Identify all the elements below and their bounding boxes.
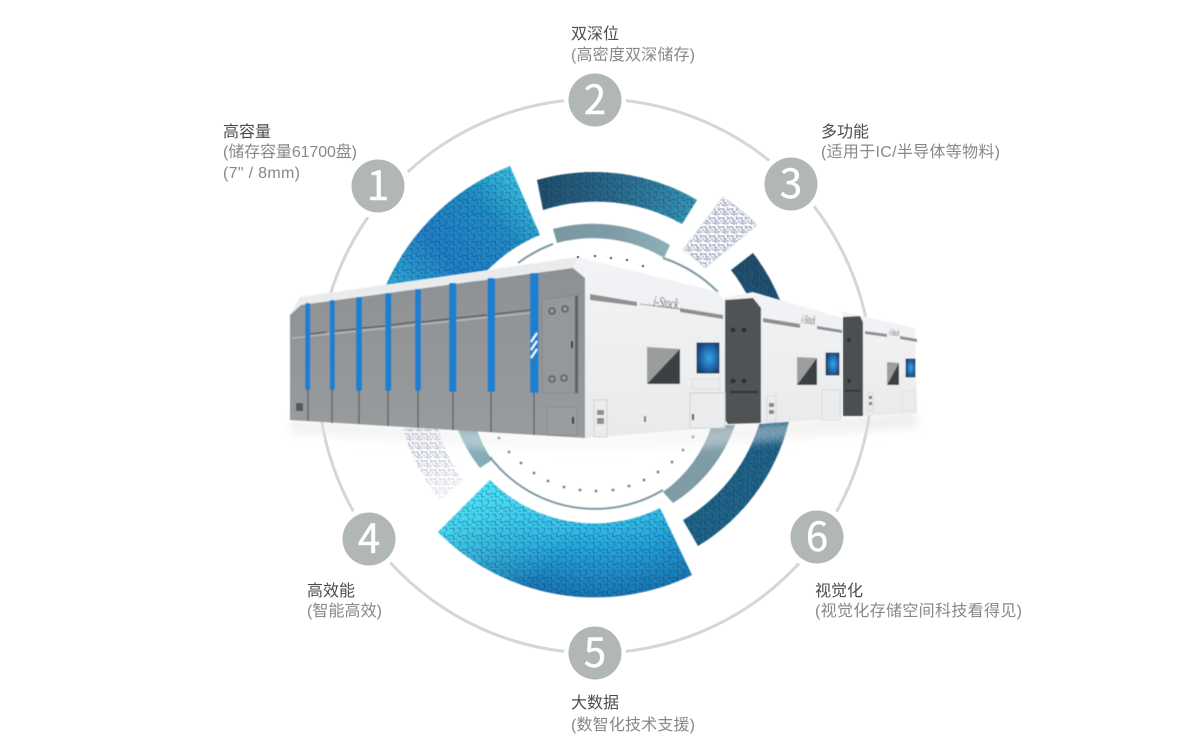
- roof dots: [577, 255, 644, 267]
- door panel: [542, 295, 578, 393]
- label 1: high capacity: (储存容量61700盘): [223, 142, 357, 161]
- label 5: big data: (数智化技术支援): [571, 716, 695, 734]
- outer ring: [318, 99, 872, 653]
- label 2: double deep: [571, 25, 695, 64]
- node 2: 2: [584, 68, 606, 126]
- node 1: [345, 153, 411, 219]
- white hatch on last stripe: [531, 333, 537, 358]
- label 5: big data: [571, 694, 695, 734]
- node 4: [337, 507, 401, 571]
- arc: large blue upper left: [380, 166, 540, 310]
- node 1: 1: [367, 154, 389, 212]
- inspection window: [647, 347, 680, 384]
- machine unit 1 roof: [290, 257, 578, 315]
- arc: dark blue top: [537, 172, 697, 224]
- dotted inner circle: [498, 436, 694, 492]
- label 6: visualisation: 视觉化: [815, 582, 863, 600]
- blue stripes: [305, 273, 539, 393]
- panel dividers: [308, 390, 534, 435]
- machine unit 2: [725, 292, 842, 424]
- machine unit 3: [840, 311, 917, 416]
- machine unit 1 front: [290, 268, 585, 438]
- node 3: [759, 152, 823, 216]
- arc: grey top: [553, 224, 670, 258]
- machine floor shadow: [290, 413, 917, 458]
- machine unit 2: i-Stock: [801, 311, 816, 328]
- label 2: double deep: 双深位: [571, 25, 619, 43]
- label 4: high efficiency: (智能高效): [307, 602, 382, 620]
- arc: white pattern upper right: [683, 197, 757, 268]
- arc: white pattern lower left: [403, 428, 463, 500]
- arc: bright blue bottom: [438, 480, 692, 597]
- label 3: multi-function: [821, 123, 1000, 161]
- touch screen: [697, 343, 719, 373]
- node 2: [564, 68, 626, 131]
- label 4: high efficiency: [307, 582, 382, 620]
- machines: [290, 257, 917, 438]
- machine unit 1 side: [573, 257, 725, 438]
- node 6: 6: [806, 505, 828, 563]
- label 6: visualisation: (视觉化存储空间科技看得见): [815, 602, 1022, 620]
- node 4: 4: [358, 507, 380, 565]
- arc: teal lower left: [458, 424, 492, 468]
- node 5: [564, 621, 626, 684]
- thin inner ring bottom: [490, 457, 663, 509]
- node 5: 5: [584, 621, 606, 679]
- label 1: high capacity: (7" / 8mm): [223, 165, 300, 182]
- front logo: [296, 403, 303, 411]
- arc: dark blue right: [683, 253, 794, 546]
- panel seam: [292, 313, 530, 338]
- machine unit 3 dark connector bolts: [845, 338, 861, 392]
- label 4: high efficiency: 高效能: [307, 582, 355, 600]
- label 1: high capacity: 高容量: [223, 123, 271, 141]
- machine unit 3: i-Stock: [889, 327, 900, 339]
- seam shadows: [310, 310, 530, 334]
- central arc graphic: [380, 166, 794, 597]
- label 1: high capacity: [223, 123, 357, 182]
- label 3: multi-function: 多功能: [821, 123, 869, 141]
- label 5: big data: 大数据: [571, 694, 619, 712]
- node 3: 3: [780, 152, 802, 210]
- label 3: multi-function: (适用于IC/半导体等物料): [821, 143, 1000, 161]
- lower small door: [547, 407, 577, 435]
- label 6: visualisation: [815, 582, 1022, 620]
- node 6: [785, 505, 849, 569]
- label 2: double deep: (高密度双深储存): [571, 46, 695, 64]
- arc: grey lower right: [663, 425, 735, 503]
- label: i-Stock: i-Stock: [653, 294, 679, 313]
- thin inner ring top: [518, 244, 718, 292]
